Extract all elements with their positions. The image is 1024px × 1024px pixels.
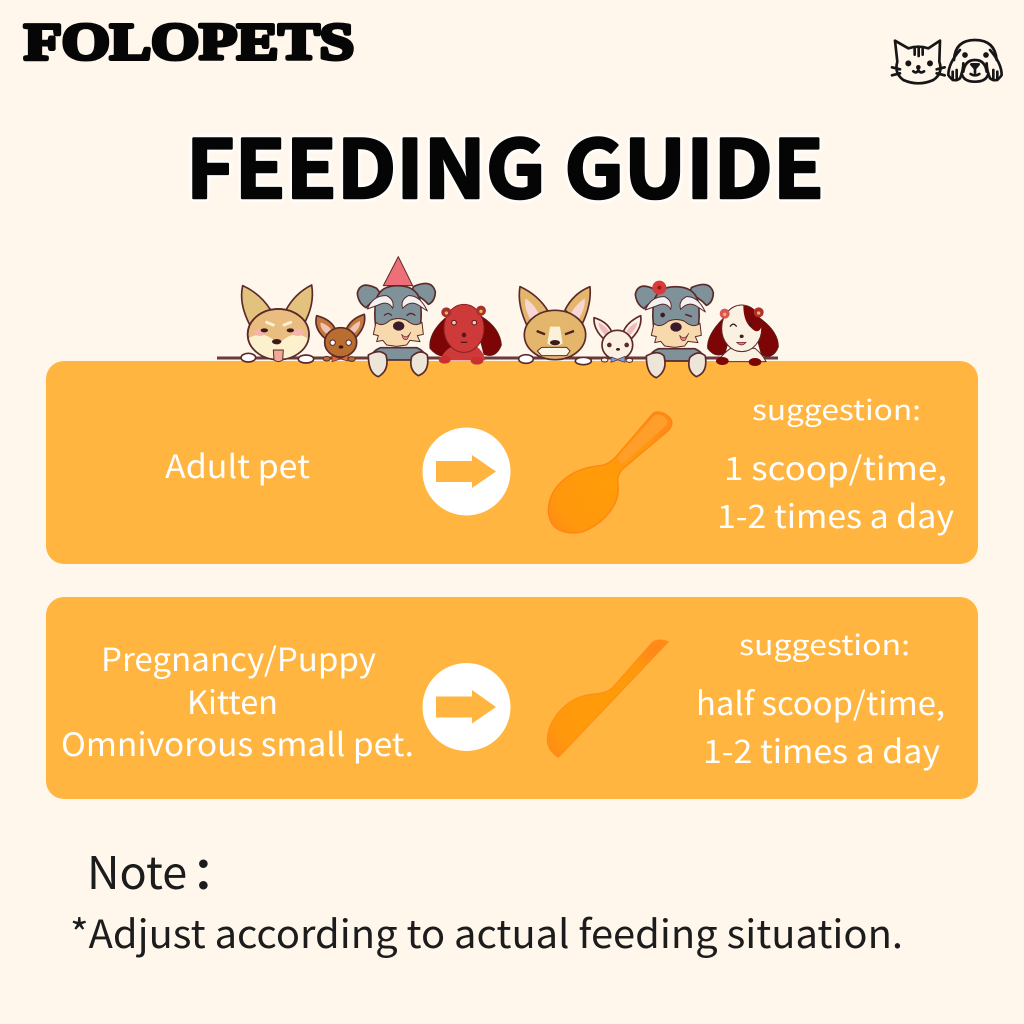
brand logo: FOLOPETS: FOLOPETS <box>24 14 354 71</box>
illustration: right group of pets <box>519 281 778 378</box>
note text: *Adjust according to actual feeding situation. <box>70 904 903 960</box>
panel background <box>46 597 978 799</box>
suggestion text: half scoop <box>696 624 945 773</box>
icon: cat and dog heads <box>892 40 1002 83</box>
suggestion text: adult pet <box>717 389 954 538</box>
pet: grey schnauzer with party hat <box>357 257 435 377</box>
pet: small brown chihuahua <box>316 314 365 362</box>
label: pet types: Kitten <box>187 678 278 724</box>
pet: white chihuahua <box>594 316 641 362</box>
title: FEEDING GUIDE: FEEDING GUIDE <box>186 106 824 222</box>
suggestion text: adult pet: suggestion: <box>752 389 921 429</box>
icon: full scoop <box>548 412 672 533</box>
icon: half scoop <box>547 640 668 757</box>
pet: shiba dog <box>241 285 314 363</box>
icon: arrow in circle <box>422 663 510 751</box>
note heading: Note： <box>87 837 237 902</box>
suggestion text: adult pet: 1-2 times a day <box>717 492 954 538</box>
suggestion text: adult pet: 1 scoop/time, <box>724 444 947 490</box>
suggestion text: half scoop: suggestion: <box>739 624 910 664</box>
pet: grey schnauzer with flower <box>635 281 713 378</box>
panel: pregnancy, puppy, kitten, small pet <box>46 597 978 799</box>
label: adult pet: Adult pet <box>165 442 310 488</box>
pet: red long-eared dog <box>430 304 501 365</box>
suggestion text: half scoop: 1-2 times a day <box>703 727 940 773</box>
panel: adult pet <box>46 361 978 564</box>
icon: arrow in circle <box>422 428 510 516</box>
suggestion text: half scoop: half scoop/time, <box>696 679 945 725</box>
illustration: left group of pets <box>241 257 501 377</box>
pet: corgi with bone <box>519 287 591 365</box>
label: pet types: Omnivorous small pet. <box>61 720 414 766</box>
pet: white and maroon long-eared dog <box>708 305 778 366</box>
panel background <box>46 361 978 564</box>
label: pet types <box>61 635 414 766</box>
label: pet types: Pregnancy/Puppy <box>101 635 376 681</box>
ledge line under pets <box>217 356 778 360</box>
